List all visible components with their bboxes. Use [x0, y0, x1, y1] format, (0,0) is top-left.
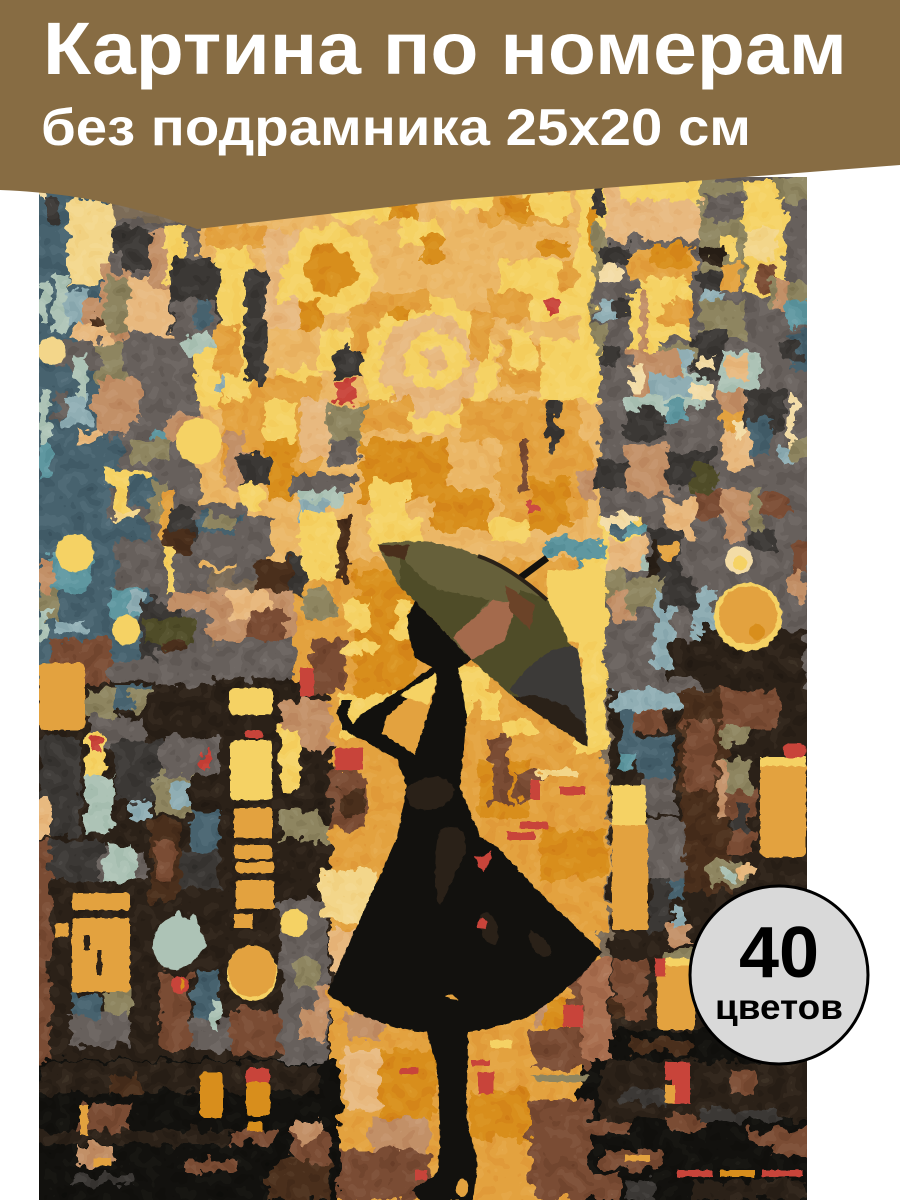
umbrella tip [520, 558, 547, 578]
central tower [335, 348, 362, 378]
umbrella rim [478, 556, 547, 600]
lower left [39, 735, 79, 835]
dress red dots [475, 850, 492, 929]
centre, around the figure [355, 570, 415, 700]
foot gap [456, 1179, 468, 1197]
painting: woman with umbrella in a city of lights [30, 170, 815, 1200]
dress shading [405, 777, 551, 956]
umbrella [377, 541, 587, 747]
badge: 40 colours [690, 886, 868, 1064]
yellow block [547, 570, 605, 642]
ground left [39, 1062, 319, 1092]
upper left [39, 192, 47, 200]
mosaic background [30, 170, 815, 1200]
badge label: цветов [715, 988, 843, 1027]
lower right [602, 679, 612, 750]
arm gap [382, 673, 437, 755]
lights and lanterns [38, 337, 806, 1180]
top centre gold [205, 225, 265, 250]
base areas [39, 193, 112, 679]
ground right [600, 1060, 815, 1120]
upper right [605, 180, 700, 240]
banner [0, 0, 900, 229]
badge number: 40 [739, 913, 819, 993]
title: Картина по номерам [43, 7, 847, 90]
tonal texture [39, 177, 807, 1200]
dress orange spot [445, 994, 458, 1000]
silhouette: woman [327, 601, 602, 1200]
pale green blob [153, 910, 207, 970]
subtitle: без подрамника 25х20 см [41, 99, 751, 157]
